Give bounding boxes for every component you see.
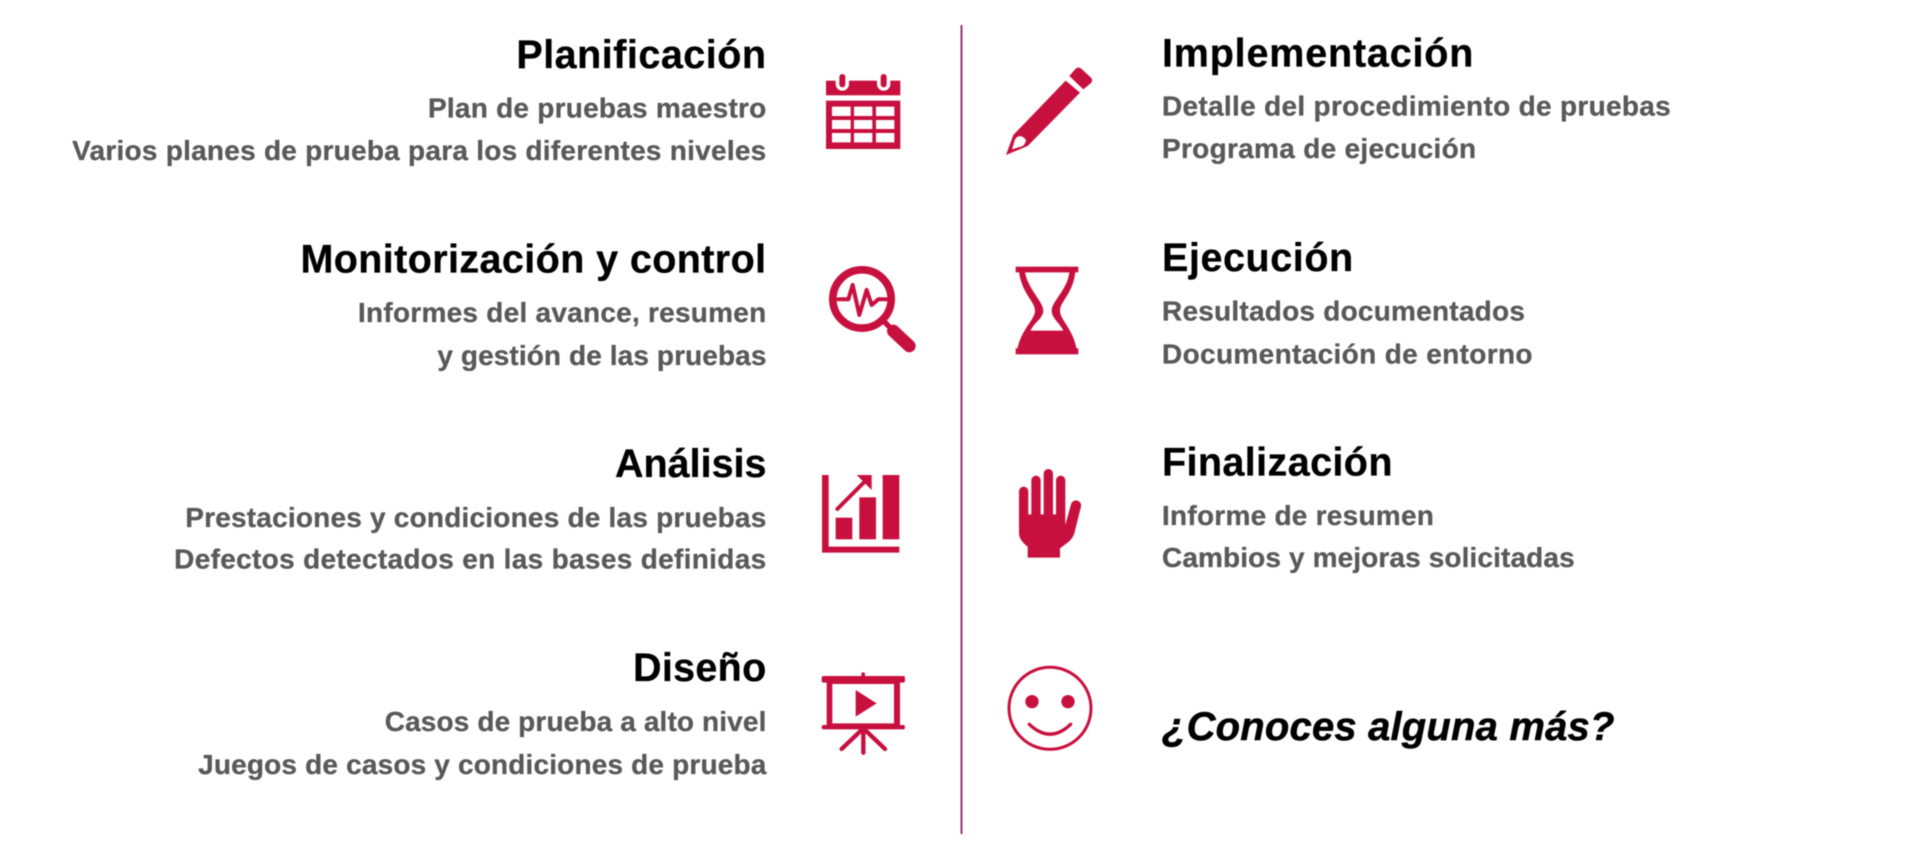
panel: finalización: [1162, 440, 1575, 573]
heading: finalización: Finalización: [1162, 440, 1393, 484]
heading: ejecución: Ejecución: [1162, 236, 1354, 280]
text: planificación line 2: Varios planes de prueba para los diferentes niveles: [72, 135, 766, 166]
text: planificación line 1: Plan de pruebas maestro: [428, 92, 766, 124]
text: análisis line 2: Defectos detectados en las bases definidas: [174, 544, 766, 575]
panel: planificación: [72, 33, 766, 166]
text: monitorización line 1: Informes del avance, resumen: [358, 297, 766, 328]
icon: smiley face: [1009, 667, 1091, 749]
text: diseño line 1: Casos de prueba a alto nivel: [385, 706, 766, 737]
text: implementación line 1: Detalle del procedimiento de pruebas: [1162, 91, 1671, 122]
text: ejecución line 2: Documentación de entorno: [1162, 338, 1533, 369]
heading: diseño: Diseño: [633, 646, 766, 690]
heading: implementación: Implementación: [1162, 32, 1474, 76]
heading: planificación: Planificación: [516, 33, 766, 77]
icon: presentation screen: [822, 672, 905, 753]
text: ejecución line 1: Resultados documentados: [1162, 295, 1525, 326]
panel: implementación: [1162, 32, 1671, 164]
heading: monitorización y control: Monitorización y control: [300, 237, 766, 281]
heading: análisis: Análisis: [615, 442, 766, 486]
panel: diseño: [198, 646, 767, 780]
panel: ejecución: [1162, 236, 1533, 369]
text: finalización line 1: Informe de resumen: [1162, 500, 1434, 531]
panel: análisis: [174, 442, 766, 575]
text: finalización line 2: Cambios y mejoras solicitadas: [1162, 542, 1575, 573]
icon: raised hand: [1019, 469, 1081, 558]
icon: pencil: [1006, 67, 1092, 155]
text: monitorización line 2: y gestión de las pruebas: [437, 340, 766, 371]
text: implementación line 2: Programa de ejecución: [1162, 133, 1476, 164]
callout: pregunta final: ¿Conoces alguna más?: [1162, 705, 1615, 749]
text: análisis line 1: Prestaciones y condiciones de las pruebas: [185, 502, 766, 533]
icon: bar chart: [822, 475, 899, 553]
central divider: [960, 25, 962, 834]
icon: hourglass: [1016, 267, 1078, 354]
icon: calendar: [826, 70, 900, 149]
icon: magnifier with pulse: [833, 270, 909, 346]
text: diseño line 2: Juegos de casos y condiciones de prueba: [198, 749, 767, 780]
panel: monitorización y control: [300, 237, 766, 371]
